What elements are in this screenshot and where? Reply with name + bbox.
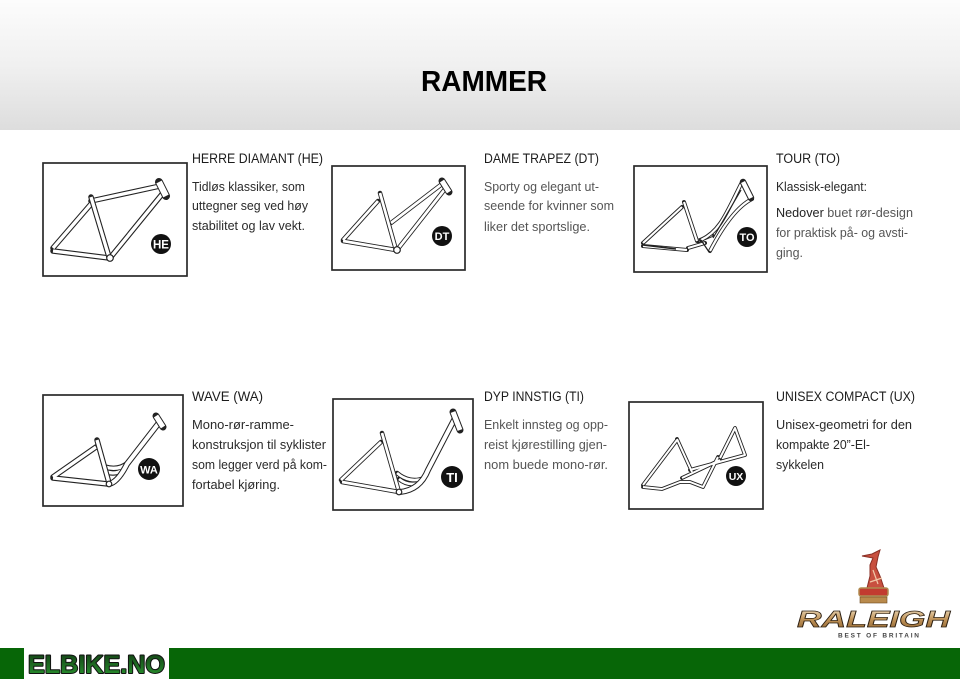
description: Sporty og elegant ut-: [484, 179, 599, 194]
description: konstruksjon til syklister: [192, 437, 327, 452]
description: reist kjørestilling gjen-: [484, 437, 607, 452]
panel: tour: [634, 151, 913, 272]
header band: [0, 0, 960, 130]
tagline: BEST OF BRITAIN: [838, 632, 919, 640]
frame illustration: DT: DT: [435, 231, 450, 243]
frame illustration: TO: TO: [739, 232, 755, 244]
frame illustration: TO: [634, 166, 767, 272]
frame illustration: HE: [43, 163, 187, 276]
frame illustration: WA: WA: [140, 464, 158, 476]
description: kompakte 20”-El-: [776, 437, 870, 452]
description: Unisex-geometri for den: [776, 417, 912, 432]
description: fortabel kjøring.: [192, 477, 280, 492]
frame illustration: UX: UX: [729, 471, 743, 483]
title: RAMMER: [421, 66, 547, 98]
frame illustration: TI: [333, 399, 473, 510]
icon: heron crest: [859, 550, 888, 603]
frame illustration: WA: [43, 395, 183, 506]
description: [776, 179, 913, 260]
description: liker det sportslige.: [484, 219, 590, 234]
wordmark: RALEIGH: [797, 606, 951, 632]
description: sykkelen: [776, 457, 824, 472]
heading: WAVE (WA): [192, 389, 263, 404]
description: [776, 417, 912, 472]
heading: UNISEX COMPACT (UX): [776, 389, 915, 404]
panel: unisex compact: [629, 389, 915, 509]
heading: DAME TRAPEZ (DT): [484, 151, 599, 166]
description: Klassisk-elegant:: [776, 179, 867, 194]
description: Tidløs klassiker, som: [192, 179, 305, 194]
description: som legger verd på kom-: [192, 457, 327, 472]
description: Nedover buet rør-design: [776, 205, 913, 220]
panel: dame trapez: [332, 151, 614, 270]
panel: herre diamant: [43, 151, 323, 276]
description: stabilitet og lav vekt.: [192, 218, 305, 233]
heading: HERRE DIAMANT (HE): [192, 151, 323, 166]
frame illustration: UX: [629, 402, 763, 509]
panel: dyp innstig: [333, 389, 608, 510]
description: [484, 417, 608, 472]
frame illustration: DT: [332, 166, 465, 270]
description: nom buede mono-rør.: [484, 457, 608, 472]
frame illustration: TI: TI: [446, 470, 458, 485]
description: [192, 417, 327, 492]
logo: elbike: ELBIKE.NO: [28, 651, 165, 679]
description: seende for kvinner som: [484, 198, 614, 213]
description: Enkelt innsteg og opp-: [484, 417, 608, 432]
footer band: [0, 648, 960, 679]
frame illustration: HE: HE: [153, 240, 169, 252]
description: [192, 179, 308, 233]
logo: raleigh: [797, 550, 951, 640]
description: Mono-rør-ramme-: [192, 417, 294, 432]
panel: wave: [43, 389, 327, 506]
heading: DYP INNSTIG (TI): [484, 389, 584, 404]
description: uttegner seg ved høy: [192, 198, 308, 213]
description: [484, 179, 614, 234]
description: ging.: [776, 245, 803, 260]
description: for praktisk på- og avsti-: [776, 225, 908, 240]
heading: TOUR (TO): [776, 151, 840, 166]
